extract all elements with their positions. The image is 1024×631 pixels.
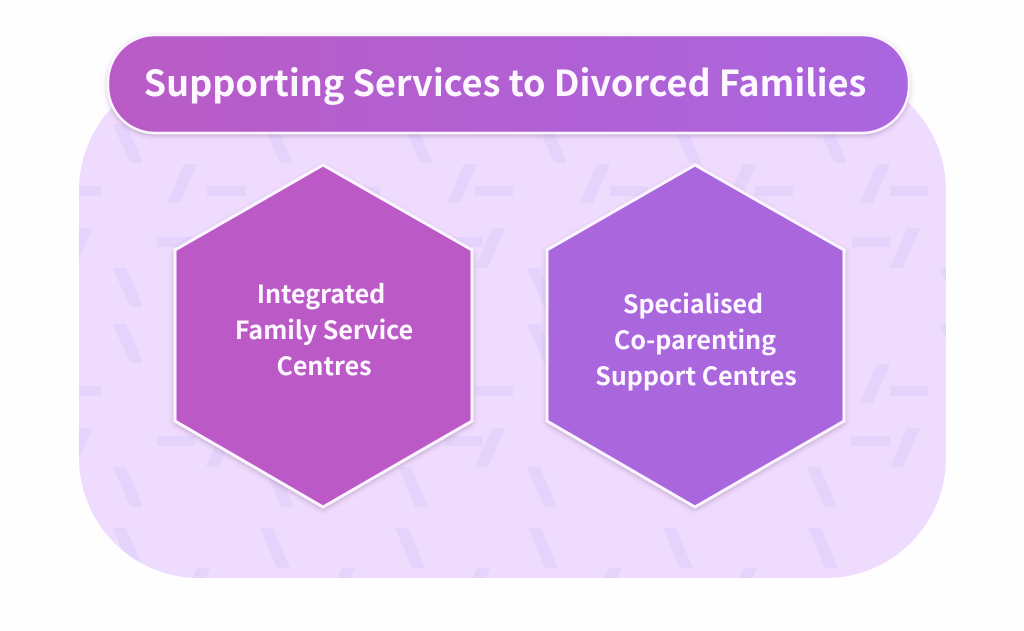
label: Integrated Family Service Centres: Centres [277,347,371,383]
hexagon: Specialised Co-parenting Support Centres [547,165,844,507]
title banner [108,35,909,133]
hexagon: Integrated Family Service Centres [175,165,472,507]
title: Supporting Services to Divorced Families [144,55,866,107]
label: Specialised Co-parenting Support Centres: Support Centres [595,357,797,393]
panel: background [79,102,946,578]
infographic [79,33,946,578]
label: Specialised Co-parenting Support Centres: Specialised [623,285,763,321]
label: Integrated Family Service Centres: Integrated [257,275,385,311]
label: Integrated Family Service Centres: Family Service [235,311,413,347]
label: Specialised Co-parenting Support Centres: Co-parenting [614,321,776,357]
